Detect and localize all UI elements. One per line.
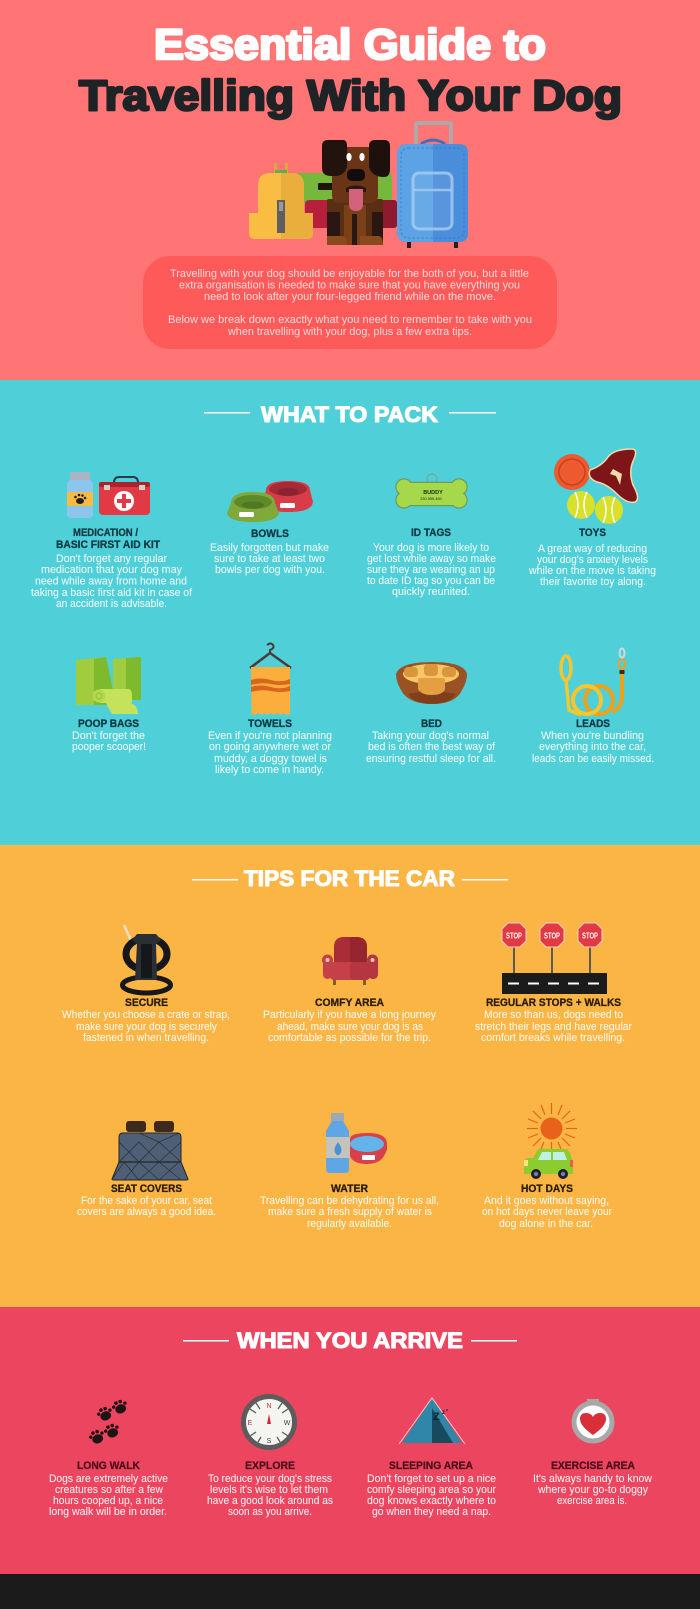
text: sleeping area: comfy sleeping area so your (367, 1484, 496, 1496)
icon: bowls (227, 481, 313, 522)
text: seat covers: covers are always a good idea. (77, 1206, 216, 1218)
item: sleeping area (367, 1398, 496, 1518)
text: secure (62, 1009, 230, 1044)
text: secure: fastened in when travelling. (83, 1032, 209, 1044)
text: bowls (210, 542, 329, 576)
icon: dog lead (561, 648, 626, 715)
icon: dog (318, 140, 390, 245)
label: leads: LEADS (576, 718, 610, 730)
icon: sun and car (524, 1103, 577, 1179)
text: id tags: get lost while away so make (367, 553, 496, 565)
icon: armchair (322, 937, 378, 985)
item: long walk (49, 1398, 168, 1518)
text: id tags: Your dog is more likely to (373, 542, 489, 554)
icon: tent (399, 1398, 465, 1444)
text: water: make sure a fresh supply of water is (268, 1206, 432, 1218)
label: sleeping area: SLEEPING AREA (389, 1460, 473, 1472)
text: exercise area: exercise area is. (557, 1495, 627, 1507)
label: medication: MEDICATION / (73, 527, 138, 539)
item: explore (207, 1396, 333, 1518)
text: long walk: hours cooped up, a nice (53, 1495, 163, 1507)
text: regular stops: comfort breaks while travelling. (481, 1032, 625, 1044)
label: toys: TOYS (579, 527, 606, 539)
text: towels (208, 730, 332, 776)
item: towels (208, 644, 332, 776)
panel: when you arrive (0, 1307, 700, 1574)
text: poop bags (72, 730, 146, 753)
label: towels: TOWELS (248, 718, 292, 730)
text: sleeping area (367, 1473, 496, 1518)
text: toys: A great way of reducing (538, 543, 647, 555)
heading: tips for the car: TIPS FOR THE CAR (244, 866, 455, 891)
text: towels: on going anywhere wet or (209, 741, 331, 753)
panel: tips for the car (0, 845, 700, 1307)
label: long walk: LONG WALK (77, 1460, 140, 1472)
callout: intro text: Below we break down exactly what you need to remember to take with you (168, 314, 532, 326)
text: bowls: sure to take at least two (214, 553, 325, 565)
text: water: regularly available. (307, 1218, 392, 1230)
panel: introduction (0, 0, 700, 380)
text: bowls: bowls per dog with you. (215, 564, 325, 576)
text: leads: When you're bundling (541, 730, 644, 742)
text: explore: levels it's wise to let them (210, 1484, 328, 1496)
item: bowls (210, 481, 329, 576)
icon: stopwatch with heart (574, 1399, 612, 1441)
icon: harness (122, 925, 170, 993)
icon: stop signs and road: STOP (582, 932, 598, 940)
label: medication: BASIC FIRST AID KIT (56, 539, 161, 551)
text: bed: bed is often the best way of (368, 741, 495, 753)
label: hot days: HOT DAYS (521, 1183, 573, 1195)
text: comfy area: ahead, make sure your dog is as (277, 1021, 423, 1033)
heading: what to pack: WHAT TO PACK (261, 402, 438, 427)
text: comfy area (263, 1009, 437, 1044)
text: secure: make sure your dog is securely (76, 1021, 218, 1033)
icon: stop signs and road: STOP (544, 932, 560, 940)
text: explore: To reduce your dog's stress (208, 1473, 332, 1485)
text: long walk (49, 1473, 168, 1518)
label: seat covers: SEAT COVERS (111, 1183, 182, 1195)
item: secure (62, 925, 230, 1044)
text: towels: muddy, a doggy towel is (214, 753, 327, 765)
text: comfy area: Particularly if you have a long journey (263, 1009, 437, 1021)
text: regular stops: stretch their legs and have regular (475, 1021, 632, 1033)
footer band (0, 1574, 700, 1609)
label: regular stops: REGULAR STOPS + WALKS (486, 997, 621, 1009)
text: regular stops (475, 1009, 632, 1044)
panel: what to pack (0, 380, 700, 845)
icon: bone id tag: BUDDY (423, 490, 443, 496)
label: comfy area: COMFY AREA (315, 997, 384, 1009)
text: medication: taking a basic first aid kit in case of (31, 587, 192, 599)
icon: towel on hanger (250, 644, 291, 715)
text: toys: while on the move is taking (528, 565, 656, 577)
item: toys (528, 449, 656, 588)
label: exercise area: EXERCISE AREA (551, 1460, 635, 1472)
text: exercise area (533, 1473, 652, 1507)
icon: paw prints (87, 1398, 129, 1446)
text: poop bags: pooper scooper! (72, 741, 146, 753)
text: hot days: And it goes without saying, (484, 1195, 609, 1207)
item: leads (532, 648, 654, 765)
label: secure: SECURE (125, 997, 168, 1009)
title (79, 21, 622, 120)
text: seat covers: For the sake of your car, seat (81, 1195, 212, 1207)
icon: suitcase (397, 123, 468, 248)
text: leads: everything into the car, (539, 741, 646, 753)
text: towels: likely to come in handy. (215, 764, 324, 776)
icon: bone id tag (396, 474, 466, 508)
text: long walk: Dogs are extremely active (49, 1473, 168, 1485)
title: Travelling With Your Dog (79, 72, 622, 120)
item: id tags (367, 474, 496, 598)
icon: toys (554, 449, 638, 524)
text: toys: their favorite toy along. (540, 576, 646, 588)
label: poop bags: POOP BAGS (78, 718, 139, 730)
callout: intro text: extra organisation is needed to make sure that you have everything you (179, 280, 520, 292)
text: medication: medication that your dog may (41, 564, 183, 576)
text: medication: Don't forget any regular (56, 553, 167, 565)
title: Essential Guide to (154, 21, 546, 69)
icon: poop bags (76, 657, 141, 714)
item: regular stops (475, 923, 632, 1044)
callout: intro text: need to look after your four-legged friend while on the move. (204, 291, 496, 303)
callout: intro text: when travelling with your dog, plus a few extra tips. (227, 326, 472, 338)
text: medication (31, 553, 192, 610)
text: bed (366, 730, 496, 765)
text: long walk: long walk will be in order. (49, 1506, 167, 1518)
text: poop bags: Don't forget the (72, 730, 145, 742)
text: hot days: on hot days never leave your (482, 1206, 612, 1218)
label: bowls: BOWLS (251, 528, 289, 540)
item: poop bags (72, 657, 146, 753)
text: comfy area: comfortable as possible for the trip. (268, 1032, 431, 1044)
icon: compass: N (266, 1403, 272, 1410)
item: water (260, 1113, 439, 1230)
text: secure: Whether you choose a crate or strap, (62, 1009, 230, 1021)
icon: compass: W (284, 1420, 291, 1427)
text: explore: soon as you arrive. (228, 1506, 312, 1518)
text: towels: Even if you're not planning (208, 730, 332, 742)
label: bed: BED (421, 718, 442, 730)
text: leads (532, 730, 654, 765)
label: id tags: ID TAGS (411, 527, 451, 539)
text: leads: leads can be easily missed. (532, 753, 654, 765)
icon: compass: S (267, 1438, 272, 1445)
item: bed (366, 662, 496, 765)
text: bed: Taking your dog's normal (372, 730, 489, 742)
text: id tags: to date ID tag so you can be (367, 575, 495, 587)
icon: stop signs and road: STOP (506, 932, 522, 940)
text: explore (207, 1473, 333, 1518)
illustration: dog with luggage (249, 123, 468, 248)
icon: tent: z (442, 1410, 445, 1416)
icon: tent: Z (433, 1411, 440, 1423)
icon: stop signs and road (502, 923, 607, 994)
text: bed: ensuring restful sleep for all. (366, 753, 496, 765)
item: seat covers (77, 1121, 216, 1218)
icon: seat cover (112, 1121, 188, 1180)
label: medication (56, 527, 161, 551)
text: id tags: quickly reunited. (392, 586, 470, 598)
text: regular stops: More so than us, dogs need to (484, 1009, 623, 1021)
icon: green blanket (295, 173, 392, 203)
text: explore: have a good look around as (207, 1495, 333, 1507)
text: id tags: sure they are wearing an up (367, 564, 495, 576)
callout: intro text (143, 256, 557, 349)
text: toys (528, 543, 656, 588)
icon: red blanket (305, 200, 397, 228)
item: hot days (482, 1103, 612, 1230)
text: exercise area: It's always handy to know (533, 1473, 652, 1485)
icon: water bottle and bowl (326, 1113, 387, 1173)
label: water: WATER (331, 1183, 368, 1195)
callout: intro text: Travelling with your dog should be enjoyable for the both of you, but a little (170, 268, 529, 280)
label: explore: EXPLORE (245, 1460, 295, 1472)
item: medication and first aid kit (31, 472, 192, 610)
icon: tent: z (446, 1407, 448, 1412)
text: sleeping area: Don't forget to set up a nice (367, 1473, 496, 1485)
text: toys: your dog's anxiety levels (537, 554, 648, 566)
icon: compass (244, 1396, 294, 1448)
item: exercise area (533, 1399, 652, 1507)
icon: bone id tag: 230-555-460 (420, 497, 442, 501)
text: sleeping area: dog knows exactly where to (367, 1495, 496, 1507)
text: bowls: Easily forgotten but make (210, 542, 329, 554)
text: hot days: dog alone in the car. (499, 1218, 593, 1230)
icon: dog bed (396, 662, 467, 704)
text: id tags (367, 542, 496, 598)
text: long walk: creatures so after a few (55, 1484, 163, 1496)
item: comfy area (263, 937, 437, 1044)
icon: backpack (249, 163, 313, 239)
text: hot days (482, 1195, 612, 1230)
text: water: Travelling can be dehydrating for us all, (260, 1195, 439, 1207)
text: sleeping area: go when they need a nap. (372, 1506, 491, 1518)
text: medication: an accident is advisable. (56, 598, 167, 610)
icon: compass: E (248, 1420, 253, 1427)
text: exercise area: where your go-to doggy (537, 1484, 649, 1496)
text: medication: need while away from home and (35, 576, 187, 588)
text: water (260, 1195, 439, 1230)
text: seat covers (77, 1195, 216, 1218)
icon: medication bottle and first aid kit (67, 472, 150, 518)
heading: when you arrive: WHEN YOU ARRIVE (237, 1328, 463, 1353)
